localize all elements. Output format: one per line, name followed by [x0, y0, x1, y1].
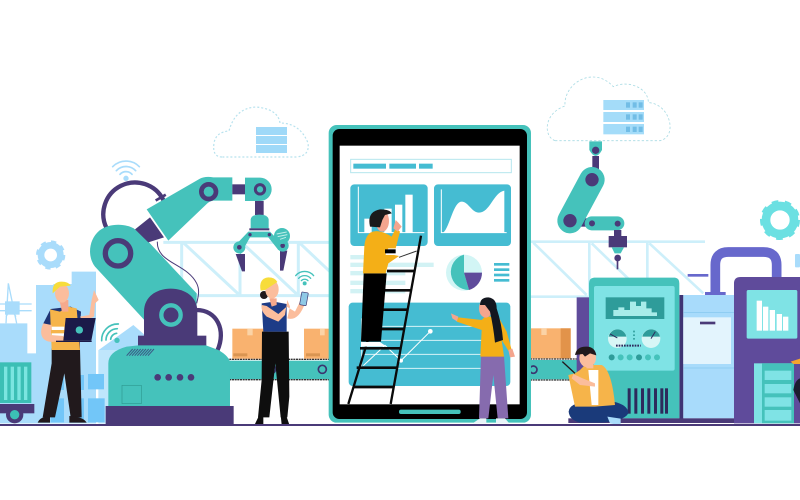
small wifi: teal [102, 324, 120, 343]
woman pointing [451, 297, 515, 423]
robot shoulder housing [144, 289, 197, 337]
server rack [603, 100, 644, 134]
rear hose [197, 310, 221, 351]
wrist [232, 184, 246, 194]
woman with phone [255, 277, 308, 425]
conveyor belt [227, 359, 330, 380]
wifi above phone [296, 271, 314, 285]
upper arm [147, 177, 232, 241]
left cloud with server [214, 107, 308, 157]
tablet frame [329, 125, 531, 423]
crane [0, 283, 32, 323]
gear: teal [762, 202, 798, 238]
wifi icon above robot [113, 161, 139, 181]
man on ladder [361, 209, 417, 347]
robot arm [90, 177, 290, 424]
purple machine [734, 277, 800, 423]
skyline [0, 272, 148, 423]
gear: light blue [38, 242, 63, 268]
cloud with server [547, 77, 670, 141]
phone [300, 292, 308, 306]
gripper [251, 215, 269, 228]
laptop [63, 318, 96, 341]
blue cabinet [683, 295, 735, 418]
truss right [530, 242, 705, 297]
small robot arm [563, 141, 627, 269]
lower arm [90, 225, 197, 333]
purple pipe [688, 252, 777, 295]
right scene: cloud, small robot, machines [530, 77, 800, 425]
top bar [351, 159, 511, 173]
robot cable [103, 182, 163, 228]
equalizer display [606, 297, 664, 319]
left scene: skyline, robot arm, workers [0, 161, 330, 425]
robot base [108, 345, 230, 407]
thin wire [157, 242, 199, 303]
elbow joint [135, 217, 164, 242]
bar chart card [350, 184, 428, 246]
indicator dots [609, 354, 660, 360]
worker with laptop [38, 282, 99, 423]
text lines [350, 255, 434, 293]
pie chart [446, 255, 482, 291]
drawer unit [754, 363, 794, 423]
vent grille [628, 388, 668, 414]
gauges [608, 329, 660, 348]
truss [163, 242, 330, 296]
legend lines [494, 263, 509, 282]
conveyor and box right [530, 328, 583, 380]
server rack [256, 127, 287, 153]
line chart card [349, 303, 510, 386]
gripper wifi badge [274, 228, 290, 244]
ladder [348, 236, 421, 404]
ground line [0, 424, 800, 426]
cardboard boxes [232, 329, 330, 359]
truck [0, 362, 34, 423]
skyline windows [51, 374, 105, 422]
tablet with dashboard [329, 125, 531, 423]
chart screen [747, 290, 797, 339]
area chart card [434, 184, 511, 246]
control cabinet [577, 278, 683, 420]
sitting man [562, 347, 628, 425]
